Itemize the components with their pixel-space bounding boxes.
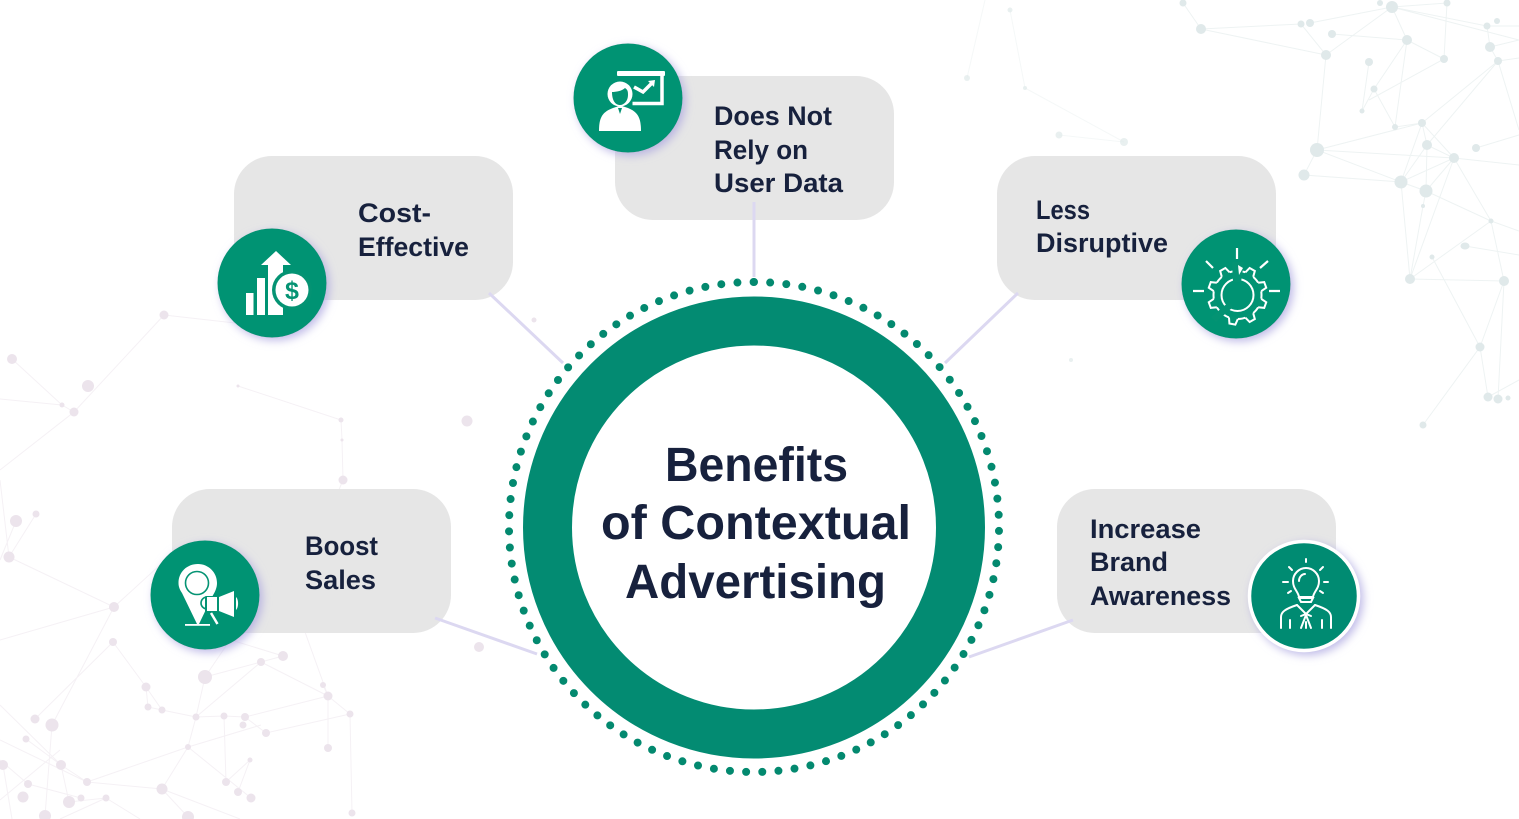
panel: does not rely on user data bbox=[574, 44, 894, 220]
panel: less disruptive: Disruptive bbox=[1036, 228, 1168, 258]
connector lines bbox=[435, 202, 1073, 657]
center title: Benefits bbox=[665, 439, 848, 492]
green ring bbox=[548, 321, 960, 734]
panel: does not rely on user data: Does Not bbox=[714, 101, 832, 131]
center title bbox=[601, 439, 911, 609]
panel: increase brand awareness: Increase bbox=[1090, 514, 1201, 544]
panel: does not rely on user data: User Data bbox=[714, 168, 844, 198]
icon: broken gear bbox=[1182, 230, 1290, 338]
icon: location pin and megaphone bbox=[150, 540, 260, 650]
panel: does not rely on user data: Rely on bbox=[714, 135, 808, 165]
panel: increase brand awareness: Awareness bbox=[1090, 581, 1231, 611]
background network: bottom left bbox=[0, 310, 536, 819]
icon: growth arrow and coin bbox=[218, 228, 326, 338]
panel: boost sales bbox=[150, 489, 451, 650]
panel: cost-effective: Cost- bbox=[358, 198, 431, 228]
panel: increase brand awareness: Brand bbox=[1090, 547, 1168, 577]
panel: boost sales: Boost bbox=[305, 531, 378, 561]
icon: growth arrow and coin: $ bbox=[285, 277, 299, 305]
icon: person with lightbulb head bbox=[1250, 542, 1358, 650]
central circle bbox=[509, 282, 999, 772]
panel: boost sales: Sales bbox=[305, 565, 376, 595]
panel: less disruptive: Less bbox=[1036, 195, 1090, 225]
center title: of Contextual bbox=[601, 497, 911, 550]
panel: cost-effective: Effective bbox=[358, 232, 469, 262]
dotted outer ring bbox=[509, 282, 999, 772]
icon: presenter with chart bbox=[574, 44, 682, 152]
panel: cost-effective bbox=[218, 156, 513, 338]
background network: top right bbox=[964, 0, 1519, 428]
panel: increase brand awareness bbox=[1057, 489, 1358, 650]
center title: Advertising bbox=[625, 556, 886, 609]
panel: less disruptive bbox=[997, 156, 1290, 338]
